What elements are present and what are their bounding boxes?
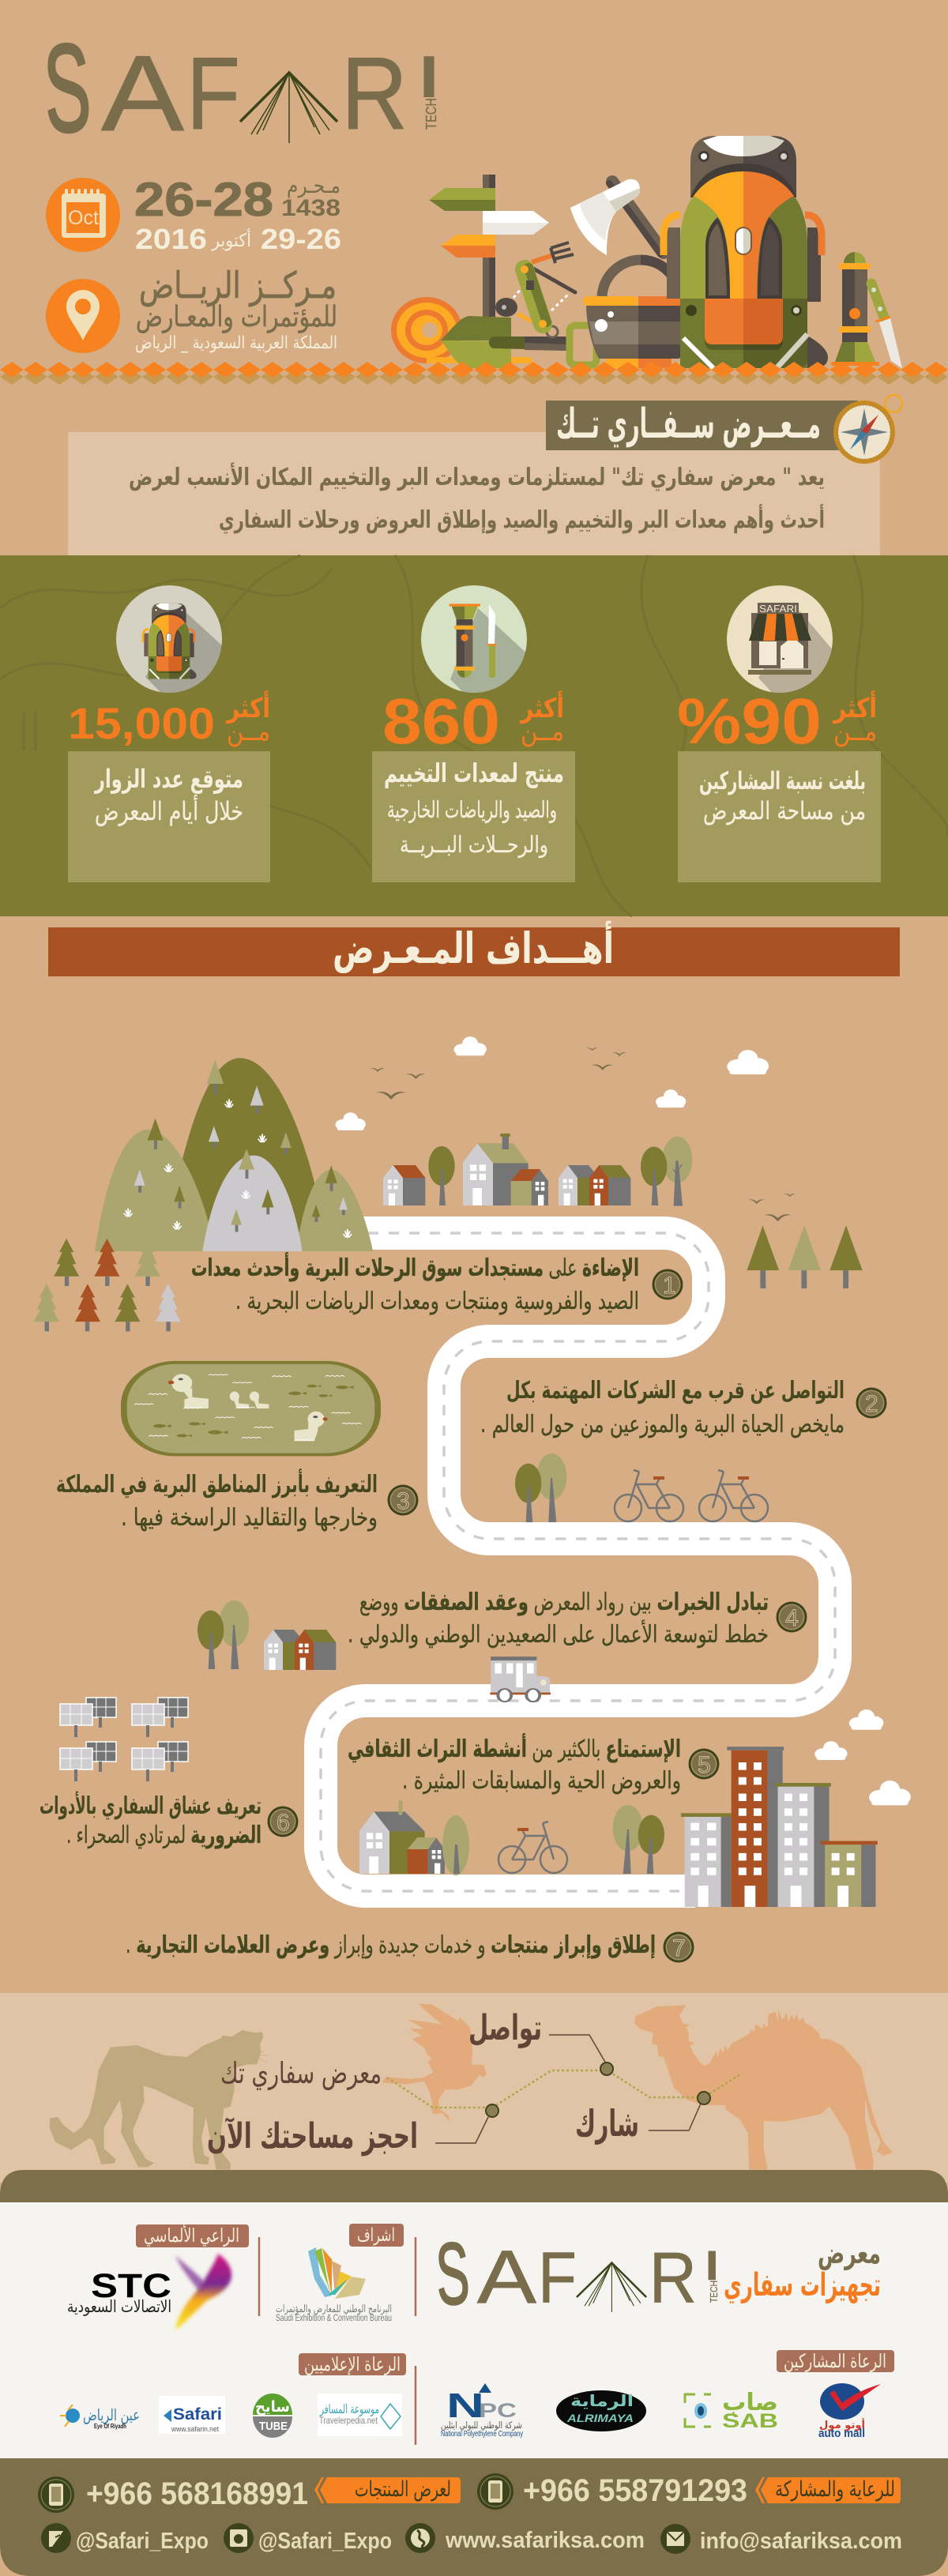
goal 3 text <box>56 1469 378 1532</box>
winding road <box>321 1233 835 1891</box>
panel: statistics band <box>0 555 948 916</box>
text box: والرحــلات البــريــة <box>400 831 548 858</box>
badge 2 <box>856 1387 886 1419</box>
panel: contact footer <box>0 2458 948 2576</box>
hijri date <box>134 173 340 226</box>
illustration: village <box>383 1134 692 1205</box>
icon: shop badge <box>727 585 837 695</box>
dividers <box>259 2237 416 2445</box>
illustration: mountains and pines <box>34 1058 373 1331</box>
contact: website: www.safariksa.com <box>445 2528 645 2553</box>
goal 2 <box>480 1377 886 1438</box>
logo: Sayeh Tube <box>253 2394 292 2438</box>
icon: knife <box>871 284 902 368</box>
goal 5 text: والعروض الحية والمسابقات المثيرة . <box>402 1767 681 1795</box>
goal 1 text <box>191 1252 639 1315</box>
route nodes <box>486 2063 710 2117</box>
badge 1 <box>653 1269 683 1300</box>
dotted route line <box>387 2070 740 2108</box>
logo: Safari Tech small: TECH <box>708 2281 720 2303</box>
text box <box>678 751 881 882</box>
logo: Al Rimaya: ALRIMAYA <box>566 2412 634 2424</box>
badge 3: 3 <box>397 1488 410 1514</box>
contact: email <box>660 2524 902 2554</box>
tag: supervised by: اشراف <box>357 2225 395 2246</box>
contact: twitter: @Safari_Expo <box>76 2529 209 2554</box>
contact: email: info@safariksa.com <box>700 2529 902 2554</box>
badge 4 <box>776 1602 807 1632</box>
number: 860 <box>382 686 564 758</box>
logo: Saudi exhibition bureau: البرنامج الوطني للمعارض والمؤتمرات <box>276 2303 392 2315</box>
illustration: camel <box>634 2005 893 2170</box>
badge 7 <box>664 1932 694 1962</box>
goal 4 text <box>348 1589 769 1649</box>
stat: products <box>372 585 575 882</box>
hijri date: 1438 <box>281 195 340 221</box>
goal 2 text: مايخص الحياة البرية والموزعين من حول العالم . <box>480 1411 845 1438</box>
number: 860: مــن <box>521 716 564 747</box>
icon: shop badge: SAFARI <box>759 603 797 615</box>
illustration: solar panels <box>60 1698 188 1781</box>
goal 3 <box>56 1469 419 1532</box>
logo: auto mall: أوتو مول <box>819 2418 865 2431</box>
icon: multi tool <box>495 243 575 337</box>
goal 1 <box>191 1252 683 1315</box>
tag: supervised by <box>349 2224 404 2247</box>
illustration: eagle <box>382 2004 487 2121</box>
venue text: للمؤتمرات والمعـارض <box>136 301 337 333</box>
logo: Safari Tech: S <box>41 18 94 159</box>
logo: Safari News <box>159 2396 225 2434</box>
logo: Eye of Riyadh: Eye Of Riyadh <box>94 2423 126 2430</box>
text box: خلال أيام المعرض <box>95 795 243 826</box>
logo: Safari Tech small: S <box>434 2224 472 2323</box>
contact: website <box>405 2523 645 2553</box>
label: book your space now: احجز مساحتك الآن <box>207 2116 418 2157</box>
logo: STC: الاتصالات السعودية <box>67 2297 171 2316</box>
icon: bedroll spiral <box>391 297 532 363</box>
logo: Safari Tech <box>41 18 441 159</box>
venue text: مـركــز الريــاض <box>139 264 337 307</box>
logo: Sayeh Tube: TUBE <box>259 2420 288 2433</box>
logo: auto mall: auto mall <box>818 2427 865 2440</box>
goal 5 text <box>348 1733 681 1795</box>
badge 7: 7 <box>672 1935 686 1961</box>
icon: mobile <box>38 2476 74 2513</box>
logo: NPC: N <box>446 2386 484 2425</box>
logo: STC: STC <box>91 2267 171 2305</box>
tag: sponsorship and participation <box>755 2477 901 2503</box>
badge 5 <box>689 1749 719 1779</box>
panel: sponsors <box>0 2202 948 2458</box>
logo: Eye of Riyadh: عين الرياض <box>83 2405 140 2424</box>
goal 5 text: الإستمتاع بالكثير من أنشطة التراث الثقافي <box>348 1733 681 1763</box>
badge 6 <box>267 1806 299 1837</box>
badge 1: 1 <box>663 1273 676 1299</box>
logo: Saudi exhibition bureau <box>276 2247 392 2323</box>
number: 860: 860 <box>382 686 500 758</box>
ground strip <box>0 2170 948 2202</box>
goal 6 <box>40 1791 299 1849</box>
logo: auto mall <box>818 2383 881 2440</box>
phone: sponsorship: +966 558791293 <box>523 2473 747 2508</box>
gregorian date: 29-26 <box>261 223 341 255</box>
icon: mobile <box>477 2473 514 2510</box>
goal 4 <box>348 1589 807 1649</box>
text box: متوقع عدد الزوار <box>94 764 243 794</box>
goal 6 text <box>40 1791 261 1849</box>
venue text <box>135 264 337 353</box>
panel: about the expo <box>68 395 902 555</box>
logo: SAB <box>685 2389 778 2432</box>
goal 4 text: خطط لتوسعة الأعمال على الصعيدين الوطني والدولي . <box>348 1619 769 1649</box>
logo: Safari Tech small <box>434 2224 720 2323</box>
illustration: city buildings and clouds <box>681 1709 911 1907</box>
illustration: roadside pines <box>747 1225 863 1288</box>
heading banner: exhibition goals: أهـــداف المـعـرض <box>333 920 614 974</box>
icon: cooking pot <box>583 260 694 368</box>
logo: Safari Tech: TECH <box>423 98 439 130</box>
icon: calendar: Oct <box>68 207 99 229</box>
panel: call to action with animals <box>0 1993 948 2183</box>
logo: Safari Tech: I <box>417 46 441 109</box>
goal 6 text: تعريف عشاق السفاري بالأدوات <box>40 1791 261 1820</box>
illustration: duck pond <box>124 1363 378 1455</box>
goal 1 text: الصيد والفروسية ومنتجات ومعدات الرياضات البحرية . <box>235 1288 639 1315</box>
text box: منتج لمعدات التخييم <box>384 758 564 789</box>
icon: compass <box>833 395 902 464</box>
text box: والصيد والرياضات الخارجية <box>387 796 557 823</box>
label: participate: شارك <box>575 2102 639 2145</box>
icon: signpost <box>429 175 549 317</box>
logo: Sayeh Tube: سايح <box>255 2398 290 2416</box>
badge 4: 4 <box>785 1605 799 1631</box>
logo: NPC: PC <box>479 2400 517 2422</box>
goal 3 text: التعريف بأبرز المناطق البرية في المملكة <box>56 1469 378 1499</box>
logo: Eye of Riyadh <box>60 2405 140 2430</box>
number: 90% <box>677 686 877 758</box>
goal 1 text: الإضاءة على مستجدات سوق الرحلات البرية وأحدث معدات <box>191 1252 639 1282</box>
logo: Safari Tech small: A <box>477 2236 537 2320</box>
phone: sponsorship <box>477 2473 901 2510</box>
gregorian date <box>135 223 341 255</box>
logo: SAB: SAB <box>722 2410 778 2432</box>
tag: display products: لعرض المنتجات <box>355 2477 451 2502</box>
hijri date: مـحـرم <box>287 174 340 198</box>
logo: Safari News: www.safarin.net <box>171 2425 219 2433</box>
badge 6: 6 <box>276 1810 290 1836</box>
illustration: cheetah <box>50 2030 268 2170</box>
illustration: camping gear <box>391 136 902 368</box>
tag: diamond sponsor: الراعي الألماسي <box>144 2224 239 2247</box>
stat: visitors <box>68 585 270 882</box>
icon: axe <box>570 179 664 255</box>
phone: products <box>38 2476 461 2513</box>
goal 7 text: إطلاق وإبراز منتجات و خدمات جديدة وإبراز وعرض العلامات التجارية . <box>126 1931 656 1959</box>
logo: Safari Tech small: I <box>704 2243 720 2288</box>
icon: backpack badge <box>116 585 224 695</box>
tag: sponsorship and participation: للرعاية والمشاركة <box>775 2477 895 2502</box>
text box: من مساحة المعرض <box>703 797 866 825</box>
label: contact: تواصل <box>468 2008 542 2048</box>
text box <box>372 751 575 882</box>
number: 15,000 <box>68 690 270 748</box>
logo: SAB: صاب <box>722 2389 778 2416</box>
venue text: المملكة العربية السعودية _ الرياض <box>135 333 337 353</box>
stat: exhibitors <box>677 585 881 882</box>
goal 4 text: تبادل الخبرات بين رواد المعرض وعقد الصفقات ووضع <box>359 1589 769 1616</box>
logo: Safari Tech small: R <box>649 2236 697 2318</box>
icon: calendar <box>46 178 120 252</box>
goal 5 <box>348 1733 719 1795</box>
logo: NPC: شركة الوطني للبولي ايثلين <box>441 2420 522 2431</box>
icon: flashlight <box>831 252 879 366</box>
logo: Travelerpedia: Travelerpedia.net <box>319 2415 378 2426</box>
logo: Safari News: Safari <box>173 2405 222 2424</box>
logo: Safari Tech: R <box>341 36 408 151</box>
heading banner: exhibition goals <box>48 920 900 976</box>
tag: participating sponsors: الرعاة المشاركين <box>784 2350 886 2372</box>
text: intro paragraph <box>129 462 825 534</box>
logo: Safari Tech: A <box>101 33 184 153</box>
number: 90%: مــن <box>833 716 877 747</box>
text box <box>68 751 270 882</box>
icon: shovel <box>441 316 596 368</box>
contact: twitter <box>41 2523 209 2554</box>
logo: NPC: National Polyethylene Company <box>441 2430 523 2439</box>
number: 860: أكثر <box>519 690 564 724</box>
text: Safari equipment expo: معرض <box>818 2236 881 2270</box>
icon: location pin <box>46 279 120 353</box>
illustration: trees and bicycles <box>515 1453 768 1522</box>
goal 6 text: الضرورية لمرتادي الصحراء . <box>66 1822 261 1849</box>
text: Safari equipment expo <box>724 2236 881 2303</box>
number: 90%: %90 <box>677 686 822 758</box>
logo: Al Rimaya <box>556 2390 646 2431</box>
hijri date: 26-28 <box>134 173 273 226</box>
tag: display products <box>314 2477 461 2503</box>
tag: media sponsors: الرعاة الإعلاميين <box>304 2353 401 2375</box>
illustration: clouds and birds <box>336 1036 796 1221</box>
contact: instagram <box>224 2523 392 2554</box>
number: 90%: أكثر <box>832 690 877 724</box>
logo: Saudi exhibition bureau: Saudi Exhibition & Convention Bureau <box>276 2312 392 2323</box>
leader lines <box>435 2035 701 2143</box>
number: 15,000: 15,000 <box>68 698 215 748</box>
number: 15,000: أكثر <box>225 690 270 724</box>
date block <box>46 173 341 255</box>
contact: instagram: @Safari_Expo <box>258 2529 392 2554</box>
number: 15,000: مــن <box>227 716 270 747</box>
badge 3 <box>387 1485 419 1515</box>
logo: Safari Tech small: F <box>538 2236 577 2318</box>
illustration: small house and trees in road loop <box>359 1800 664 1875</box>
logo: STC <box>67 2254 231 2330</box>
badge 5: 5 <box>698 1752 711 1778</box>
badge 2: 2 <box>865 1391 878 1417</box>
goal 2 text <box>480 1377 845 1438</box>
phone: products: +966 568168991 <box>86 2476 308 2511</box>
gregorian date: أكتوبر <box>211 228 251 251</box>
icon: flashlight badge <box>421 585 529 695</box>
illustration: houses and trees by goal 4 <box>198 1600 336 1670</box>
zigzag diamond band <box>0 362 948 385</box>
gregorian date: 2016 <box>135 223 207 255</box>
goal 3 text: وخارجها والتقاليد الراسخة فيها . <box>121 1504 378 1532</box>
goal 7 <box>126 1931 694 1962</box>
logo: Travelerpedia <box>318 2394 402 2436</box>
venue block <box>46 264 337 353</box>
logo: Al Rimaya: الرماية <box>570 2391 634 2410</box>
icon: backpack <box>664 136 828 368</box>
logo: NPC <box>441 2383 523 2439</box>
logo: Travelerpedia: موسوعة المسافر <box>319 2401 379 2417</box>
label: Safari Tech Expo: معرض سفاري تك <box>220 2056 382 2090</box>
logo: Safari Tech: F <box>186 36 240 151</box>
illustration: bus <box>490 1657 551 1702</box>
